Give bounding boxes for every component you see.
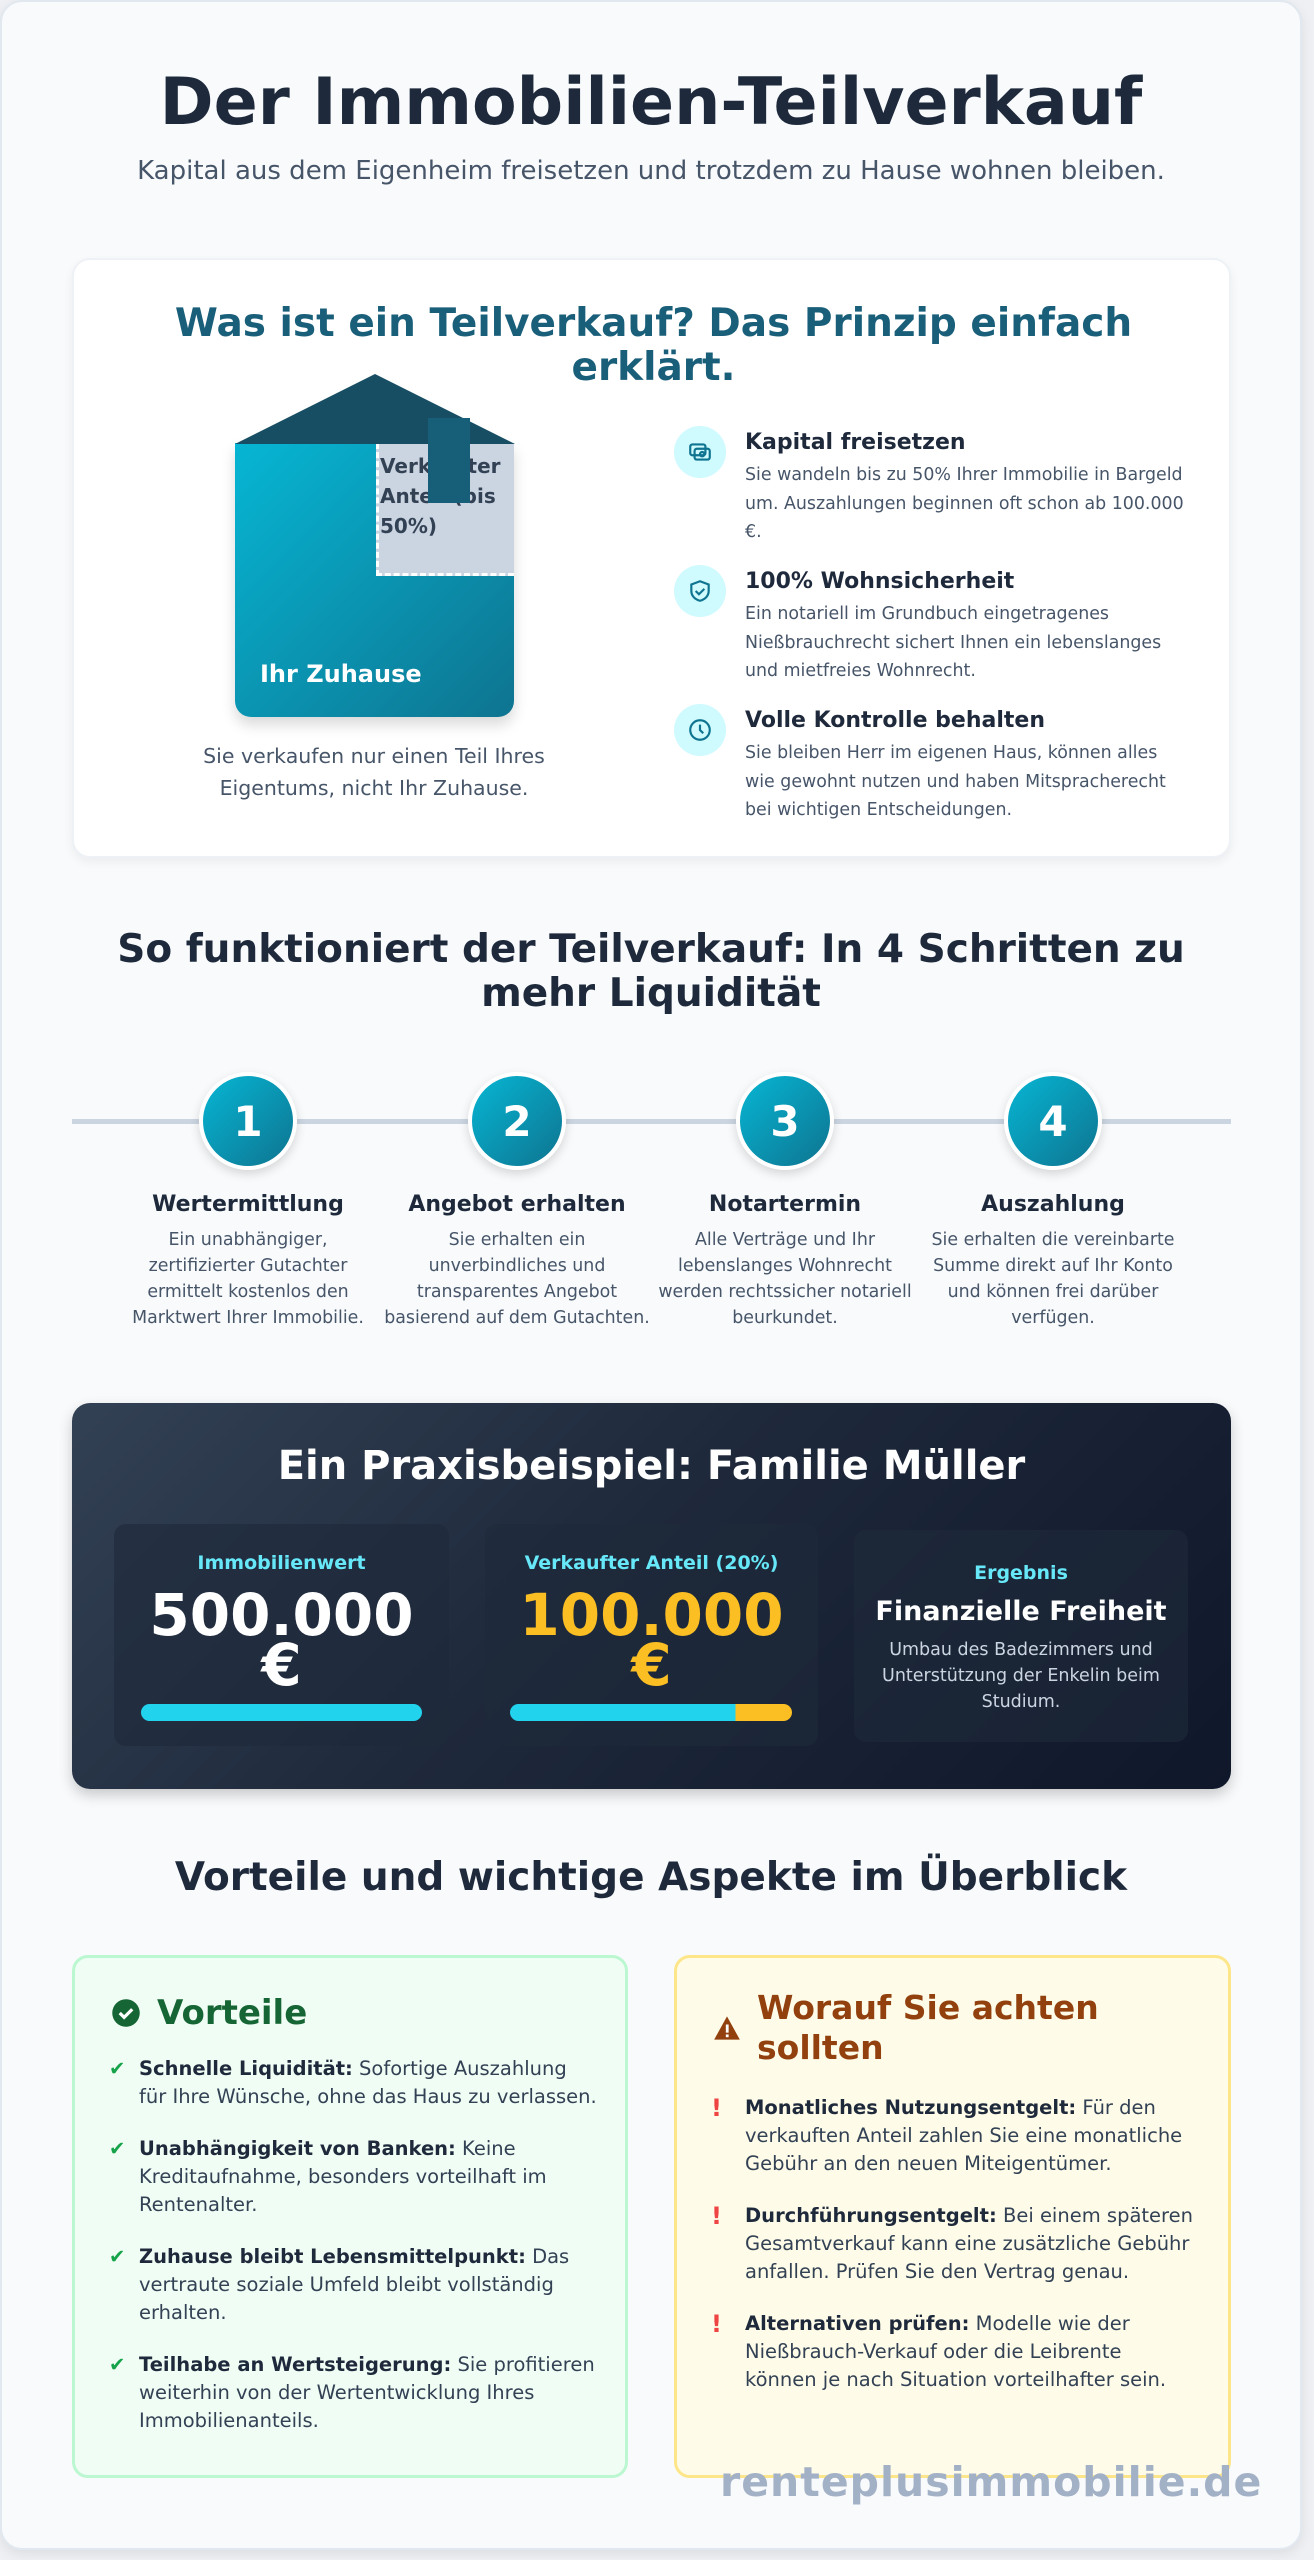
card: Immobilienwert: Immobilienwert	[197, 1552, 366, 1574]
house caption: Sie verkaufen nur einen Teil Ihres Eigentums, nicht Ihr Zuhause.	[203, 744, 545, 800]
step 3: Notartermin	[709, 1192, 861, 1217]
card: Ergebnis: Finanzielle Freiheit	[875, 1596, 1167, 1627]
house illustration: Verkaufter Anteil (bis 50%)	[380, 454, 501, 538]
step 4: 4	[1038, 1096, 1068, 1146]
step 4	[932, 1076, 1174, 1328]
step 4: Sie erhalten die vereinbarte Summe direkt auf Ihr Konto und können frei darüber verfügen.	[932, 1230, 1174, 1328]
list: Monatliches Nutzungsentgelt: Für den	[745, 2096, 1156, 2119]
step 1: 1	[233, 1096, 263, 1146]
card: Verkaufter Anteil: €	[631, 1631, 672, 1699]
card: Immobilienwert: €	[261, 1631, 302, 1699]
card: Ergebnis: Umbau des Badezimmers und Unterstützung der Enkelin beim Studium.	[882, 1640, 1160, 1712]
card: Verkaufter Anteil: Verkaufter Anteil (20%)	[525, 1552, 778, 1574]
icon: shield	[674, 565, 726, 617]
heading with warning icon	[714, 1988, 1099, 2067]
feature: Kontrolle	[674, 704, 1166, 820]
list: !	[711, 2202, 722, 2230]
step 1: Ein unabhängiger, zertifizierter Gutachter ermittelt kostenlos den Marktwert Ihrer Immobilie.	[132, 1230, 364, 1328]
step 3: 3	[770, 1096, 800, 1146]
card: Ergebnis: Ergebnis	[974, 1562, 1068, 1584]
list: Rentenalter.	[139, 2193, 257, 2216]
subtitle: Kapital aus dem Eigenheim freisetzen und trotzdem zu Hause wohnen bleiben.	[137, 156, 1165, 186]
step 1	[132, 1076, 364, 1328]
watermark: renteplusimmobilie.de	[720, 2458, 1262, 2506]
card: Ergebnis	[854, 1530, 1188, 1742]
list: Zuhause bleibt Lebensmittelpunkt: Das	[139, 2245, 569, 2268]
icon: clock	[674, 704, 726, 756]
list: Gesamtverkauf kann eine zusätzliche Gebühr	[745, 2232, 1189, 2255]
list: Alternativen prüfen: Modelle wie der	[745, 2312, 1130, 2335]
list	[711, 2094, 1193, 2391]
step 4: Auszahlung	[981, 1192, 1125, 1217]
list: verkauften Anteil zahlen Sie eine monatliche	[745, 2124, 1182, 2147]
panel: Vorteile	[72, 1955, 628, 2478]
list: Nießbrauch-Verkauf oder die Leibrente	[745, 2340, 1122, 2363]
list: ✔	[109, 2057, 125, 2080]
step 2	[384, 1076, 650, 1328]
house illustration	[230, 374, 519, 730]
card: Verkaufter Anteil	[485, 1524, 818, 1746]
feature: Kapital: Sie wandeln bis zu 50% Ihrer Immobilie in Bargeld um. Auszahlungen beginnen oft schon ab 100.000 €.	[745, 465, 1184, 542]
list: Unabhängigkeit von Banken: Keine	[139, 2137, 516, 2160]
list: !	[711, 2310, 722, 2338]
section heading: 4 Schritte: So funktioniert der Teilverkauf: In 4 Schritten zu	[117, 927, 1185, 972]
list: vertraute soziale Umfeld bleibt vollständig	[139, 2273, 554, 2296]
title: Der Immobilien-Teilverkauf	[160, 65, 1142, 140]
feature: Kontrolle: Volle Kontrolle behalten	[745, 708, 1045, 733]
list: !	[711, 2094, 722, 2122]
step 2: Sie erhalten ein unverbindliches und transparentes Angebot basierend auf dem Gutachten.	[384, 1230, 650, 1328]
heading with warning icon: Worauf Sie achten	[757, 1988, 1099, 2027]
panel: Praxisbeispiel	[72, 1403, 1231, 1789]
list	[109, 2057, 597, 2432]
feature: Kontrolle: Sie bleiben Herr im eigenen Haus, können alles wie gewohnt nutzen und haben Mitspracherecht bei wichtigen Entscheidungen.	[745, 743, 1166, 820]
heading with check icon: Vorteile	[157, 1993, 307, 2033]
card: Immobilienwert	[114, 1524, 449, 1746]
list: ✔	[109, 2137, 125, 2160]
list: Durchführungsentgelt: Bei einem späteren	[745, 2204, 1193, 2227]
list: für Ihre Wünsche, ohne das Haus zu verlassen.	[139, 2085, 597, 2108]
icon: money	[674, 426, 726, 478]
list: Kreditaufnahme, besonders vorteilhaft im	[139, 2165, 547, 2188]
list: können je nach Situation vorteilhafter sein.	[745, 2368, 1166, 2391]
feature: Wohnsicherheit: Ein notariell im Grundbuch eingetragenes Nießbrauchrecht sichert Ihnen ein lebenslanges und mietfreies Wohnrecht.	[745, 604, 1161, 681]
feature: Kapital: Kapital freisetzen	[745, 430, 966, 455]
list: anfallen. Prüfen Sie den Vertrag genau.	[745, 2260, 1129, 2283]
panel: Prinzip	[72, 258, 1231, 858]
list: Teilhabe an Wertsteigerung: Sie profitieren	[139, 2353, 595, 2376]
panel heading: erklärt.	[572, 345, 736, 390]
heading: Ein Praxisbeispiel: Familie Müller	[278, 1443, 1025, 1489]
card: Verkaufter Anteil: 100.000	[519, 1581, 784, 1649]
step 1: Wertermittlung	[152, 1192, 344, 1217]
step 2: Angebot erhalten	[408, 1192, 626, 1217]
house illustration: Ihr Zuhause	[260, 660, 422, 688]
timeline	[72, 1076, 1231, 1328]
step 3: Alle Verträge und Ihr lebenslanges Wohnrecht werden rechtssicher notariell beurkundet.	[658, 1230, 912, 1328]
list: Gebühr an den neuen Miteigentümer.	[745, 2152, 1112, 2175]
section heading: Vorteile: Vorteile und wichtige Aspekte im Überblick	[175, 1855, 1127, 1900]
list: ✔	[109, 2353, 125, 2376]
step 2: 2	[502, 1096, 532, 1146]
list: Schnelle Liquidität: Sofortige Auszahlung	[139, 2057, 567, 2080]
feature: Kapital	[674, 426, 1184, 542]
panel heading: Was ist ein Teilverkauf? Das Prinzip einfach	[175, 301, 1132, 346]
list: weiterhin von der Wertentwicklung Ihres	[139, 2381, 534, 2404]
feature: Wohnsicherheit: 100% Wohnsicherheit	[745, 569, 1014, 594]
section heading: 4 Schritte	[117, 927, 1185, 1016]
list: Immobilienanteils.	[139, 2409, 319, 2432]
panel: Worauf achten	[674, 1955, 1231, 2478]
card: Immobilienwert: 500.000	[149, 1581, 414, 1649]
list: erhalten.	[139, 2301, 227, 2324]
step 3	[658, 1076, 912, 1328]
list: ✔	[109, 2245, 125, 2268]
feature: Wohnsicherheit	[674, 565, 1161, 681]
heading with warning icon: sollten	[757, 2028, 884, 2067]
panel heading	[175, 301, 1132, 390]
section heading: 4 Schritte: mehr Liquidität	[481, 971, 821, 1016]
